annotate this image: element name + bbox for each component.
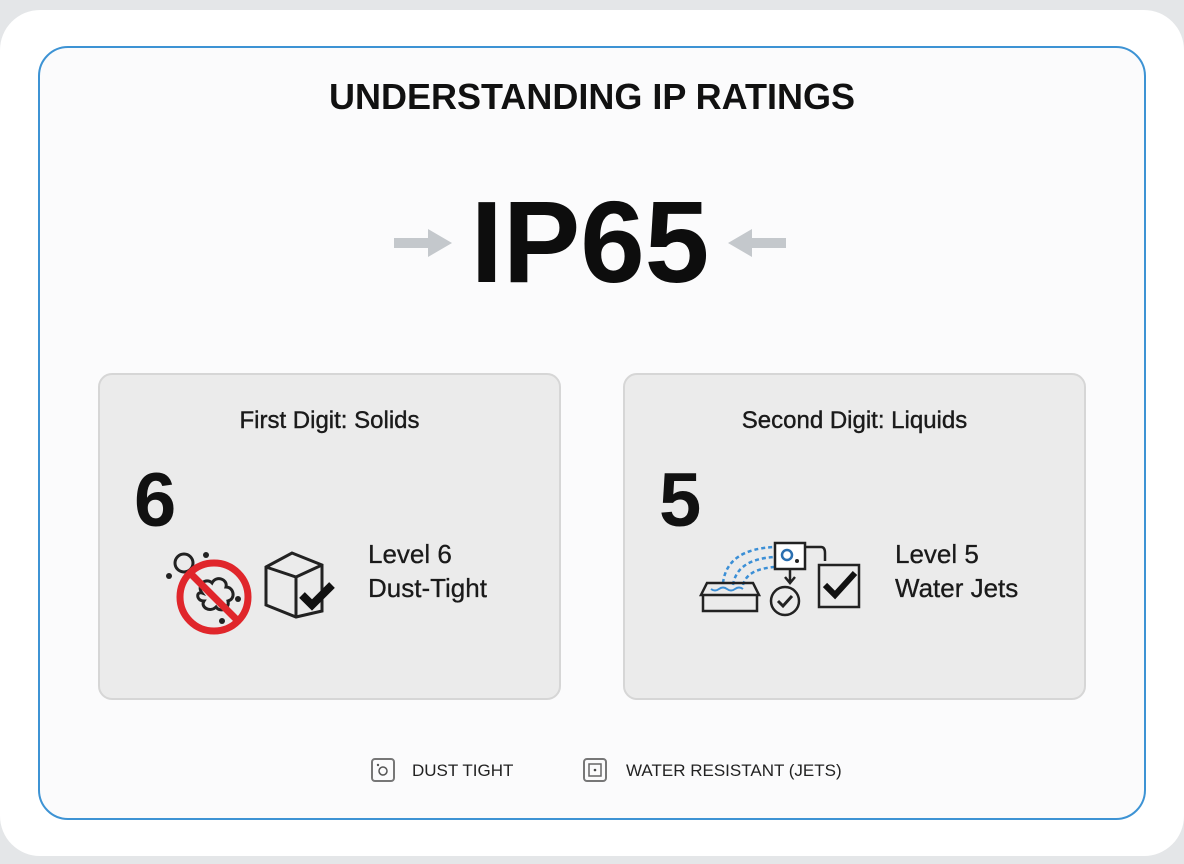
text level 6 — [368, 539, 487, 603]
heading liquids: Second Digit: Liquids — [742, 407, 967, 434]
arrow right — [728, 229, 786, 257]
title: UNDERSTANDING IP RATINGS — [329, 76, 855, 117]
arrow left — [394, 229, 452, 257]
icon: water jets — [699, 542, 860, 616]
text level 6: Level 6 — [368, 539, 452, 569]
heading solids: First Digit: Solids — [239, 407, 420, 434]
main rating IP65: IP65 — [471, 177, 709, 307]
legend: dust tight: DUST TIGHT — [412, 761, 513, 780]
text level 5 — [895, 539, 1018, 603]
panel: liquids — [623, 373, 1086, 700]
legend: water resistant: WATER RESISTANT (JETS) — [626, 761, 842, 780]
legend: water resistant — [583, 758, 842, 782]
legend — [371, 758, 842, 782]
icon: no dust — [166, 552, 252, 634]
digit 5: 5 — [659, 458, 701, 543]
text level 5: Water Jets — [895, 573, 1018, 603]
text level 6: Dust-Tight — [368, 573, 487, 603]
text level 5: Level 5 — [895, 539, 979, 569]
digit 6: 6 — [134, 458, 176, 543]
icon: box check — [264, 551, 335, 619]
legend: dust tight — [371, 758, 513, 782]
panel: solids — [98, 373, 561, 700]
